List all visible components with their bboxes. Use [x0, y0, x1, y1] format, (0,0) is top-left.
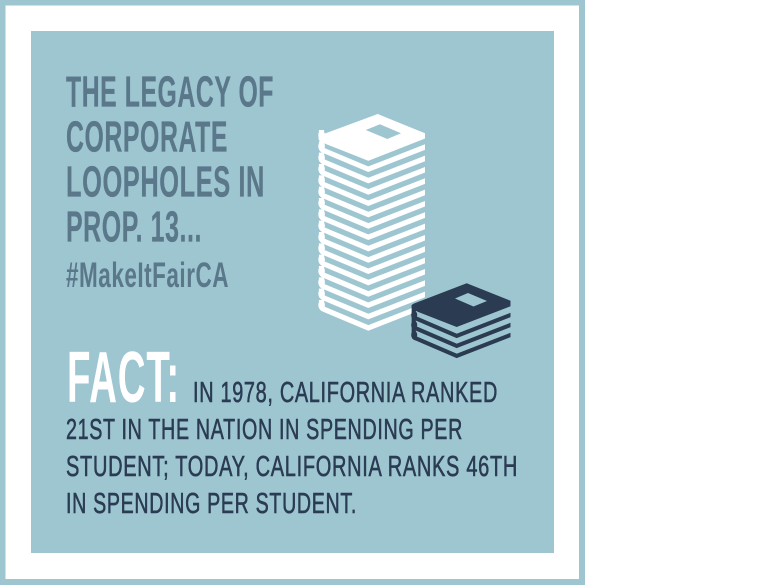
- title: THE LEGACY OF: [66, 68, 274, 116]
- title: PROP. 13...: [66, 204, 202, 252]
- hashtag: #MakeItFairCA: [66, 256, 229, 295]
- outer frame: [2, 2, 582, 582]
- fact text: STUDENT; TODAY, CALIFORNIA RANKS 46TH: [66, 451, 518, 483]
- title: CORPORATE: [66, 114, 228, 162]
- icon: small dark stack of books: [411, 283, 515, 356]
- fact text: IN 1978, CALIFORNIA RANKED: [193, 377, 498, 409]
- icon: tall white stack of books: [318, 114, 432, 328]
- fact label: FACT:: [67, 337, 180, 418]
- title: [66, 68, 274, 252]
- fact text: 21ST IN THE NATION IN SPENDING PER: [66, 414, 463, 446]
- fact text: IN SPENDING PER STUDENT.: [66, 488, 357, 520]
- fact text: [66, 377, 518, 520]
- panel: main background: [31, 31, 554, 553]
- title: LOOPHOLES IN: [66, 158, 265, 206]
